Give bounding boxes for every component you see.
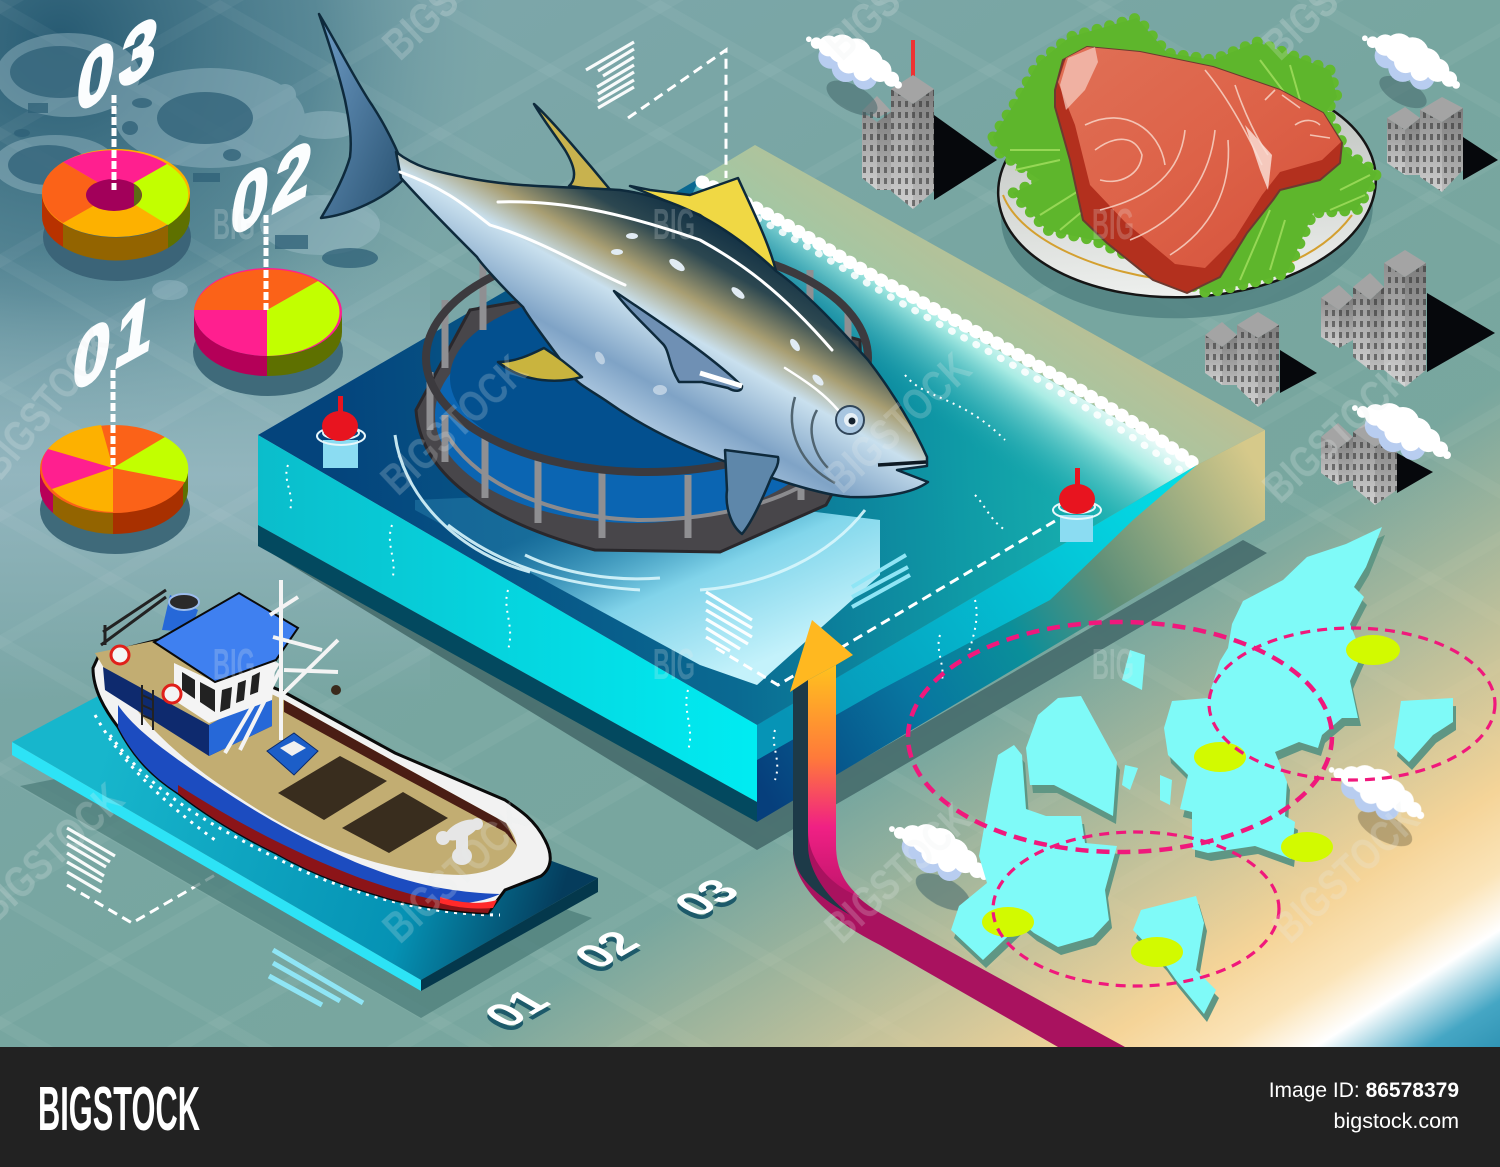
label 02: 02 — [226, 117, 323, 256]
hull outer — [93, 640, 550, 913]
second dorsal fin — [630, 178, 776, 271]
tail — [319, 14, 403, 218]
railing — [101, 590, 166, 645]
cabin white band — [174, 660, 276, 723]
left face — [258, 435, 757, 802]
pie chart 03 — [42, 149, 191, 281]
site url: bigstock.com — [1334, 1109, 1459, 1133]
cage posts — [430, 262, 848, 538]
watermarks: BIGSTOCK — [1253, 354, 1419, 512]
gill lines — [792, 397, 835, 483]
watermarks: BIG — [653, 200, 695, 249]
pie chart 02 — [193, 268, 343, 396]
funnel — [162, 595, 198, 632]
watermarks: BIG — [1092, 640, 1134, 689]
watermarks: BIGSTOCK — [371, 346, 537, 504]
lateral white lines — [400, 172, 838, 410]
ladder — [142, 685, 153, 730]
hatches — [278, 756, 387, 820]
deck — [95, 640, 517, 875]
number 02: 02 — [562, 928, 651, 980]
cage top ring — [426, 244, 868, 472]
plate shadow — [20, 770, 592, 1018]
number 03: 03 — [662, 871, 751, 923]
ventral fin — [725, 450, 778, 534]
plate — [12, 695, 598, 980]
ripples — [395, 435, 865, 590]
life rings — [111, 646, 181, 703]
dotted water lines — [286, 375, 1005, 780]
watermarks: BIG — [213, 200, 255, 249]
lettuce — [993, 18, 1377, 293]
number 02: 02 — [562, 923, 651, 975]
water top — [258, 178, 1197, 725]
footer bar: BIGSTOCK — [38, 1075, 200, 1144]
number 03: 03 — [662, 876, 751, 928]
pie labels — [68, 0, 323, 411]
mast and arms — [225, 580, 338, 753]
buoys — [317, 396, 1101, 542]
tuna — [319, 14, 928, 534]
map markers and dashed rings — [908, 622, 1495, 986]
watermarks: BIG — [213, 640, 255, 689]
watermarks: BIGSTOCK — [1263, 794, 1429, 952]
footer bar — [0, 1047, 1500, 1167]
world map — [951, 527, 1456, 1022]
buildings group B — [1387, 97, 1498, 192]
plate shadow — [996, 98, 1378, 328]
floating walkway — [416, 280, 862, 552]
watermarks: BIGSTOCK — [373, 794, 539, 952]
spots — [593, 233, 825, 395]
label 01: 01 — [68, 272, 165, 411]
buildings group D — [1205, 312, 1317, 407]
bottom numbers — [472, 871, 751, 1039]
pie chart 01 — [40, 425, 190, 554]
number 01: 01 — [472, 987, 561, 1039]
buildings group E — [1321, 418, 1433, 505]
number 01: 01 — [472, 982, 561, 1034]
dashed connector lines — [67, 50, 1060, 923]
watermarks: BIG — [1092, 200, 1134, 249]
wake — [95, 715, 500, 915]
fish cage — [395, 244, 868, 590]
meat fibers — [1085, 70, 1330, 255]
striped markers — [67, 42, 752, 892]
buildings group A — [862, 40, 997, 209]
pectoral fin — [614, 291, 742, 391]
bulwark shade — [284, 700, 517, 846]
plate — [992, 65, 1382, 307]
fishing boat — [12, 580, 598, 1018]
watermarks — [0, 0, 1429, 952]
cloud shadows — [821, 69, 1432, 918]
foam shoreline — [702, 182, 1196, 470]
body — [396, 152, 928, 497]
sea farm block — [258, 145, 1267, 850]
image id: Image ID: 86578379 — [1269, 1079, 1459, 1102]
cabin roof — [154, 593, 298, 682]
right face — [757, 430, 1265, 822]
eye — [836, 406, 864, 434]
land shadows — [954, 535, 1456, 1022]
shallow water highlight — [415, 490, 880, 685]
hull blue band — [118, 705, 500, 904]
watermarks: BIGSTOCK — [815, 794, 981, 952]
flow arrow — [790, 620, 1125, 1047]
meat — [1055, 47, 1342, 293]
anal fin — [498, 348, 582, 381]
block shadow — [258, 530, 1267, 850]
buildings group C — [1321, 250, 1495, 387]
dorsal fin — [534, 104, 612, 192]
clouds — [806, 33, 1460, 918]
hull red stripe — [178, 785, 492, 913]
pie stems — [113, 95, 266, 465]
sand top — [700, 145, 1265, 465]
winch box — [267, 733, 318, 775]
watermarks: BIGSTOCK — [815, 344, 981, 502]
watermarks: BIG — [653, 640, 695, 689]
land — [951, 527, 1453, 1014]
cabin lower — [103, 667, 272, 756]
windlass — [436, 815, 483, 865]
tuna steak on plate — [992, 18, 1382, 328]
